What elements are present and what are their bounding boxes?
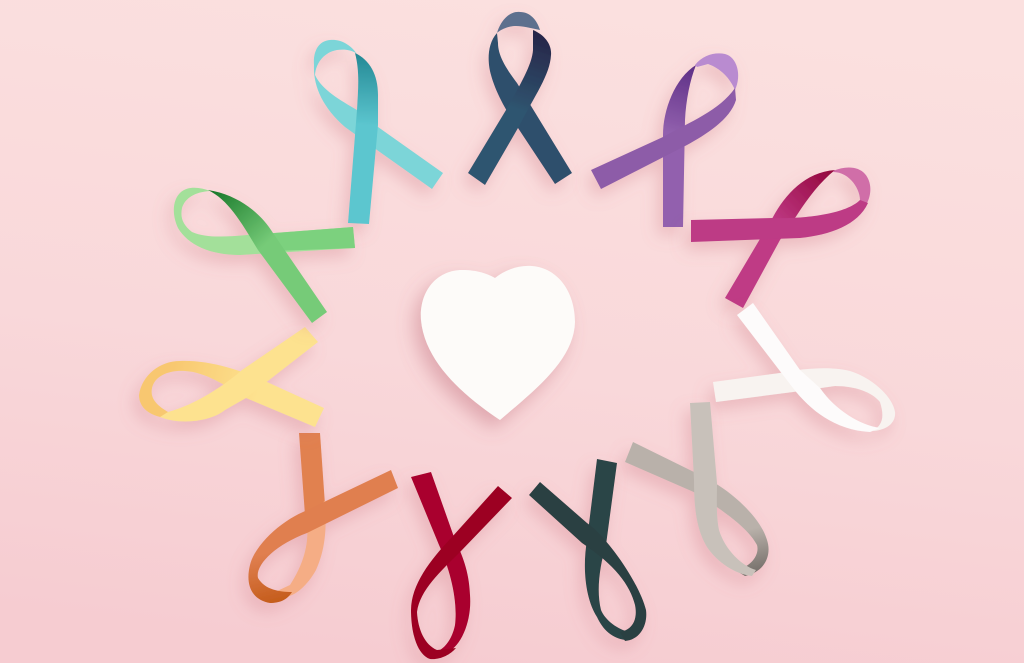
icon: crimson ribbon bbox=[411, 472, 512, 659]
icon: green ribbon bbox=[174, 188, 355, 323]
icon: dark green ribbon bbox=[529, 459, 646, 641]
icon: teal ribbon bbox=[314, 40, 443, 224]
icon: navy ribbon bbox=[468, 12, 572, 185]
icon: orange ribbon bbox=[248, 433, 398, 603]
icon: white paper heart bbox=[421, 266, 575, 420]
icon: magenta ribbon bbox=[691, 168, 870, 308]
icon: white ribbon bbox=[713, 303, 895, 432]
icon: yellow ribbon bbox=[139, 327, 324, 427]
icon: purple ribbon bbox=[591, 53, 738, 227]
icon: grey ribbon bbox=[625, 402, 769, 576]
